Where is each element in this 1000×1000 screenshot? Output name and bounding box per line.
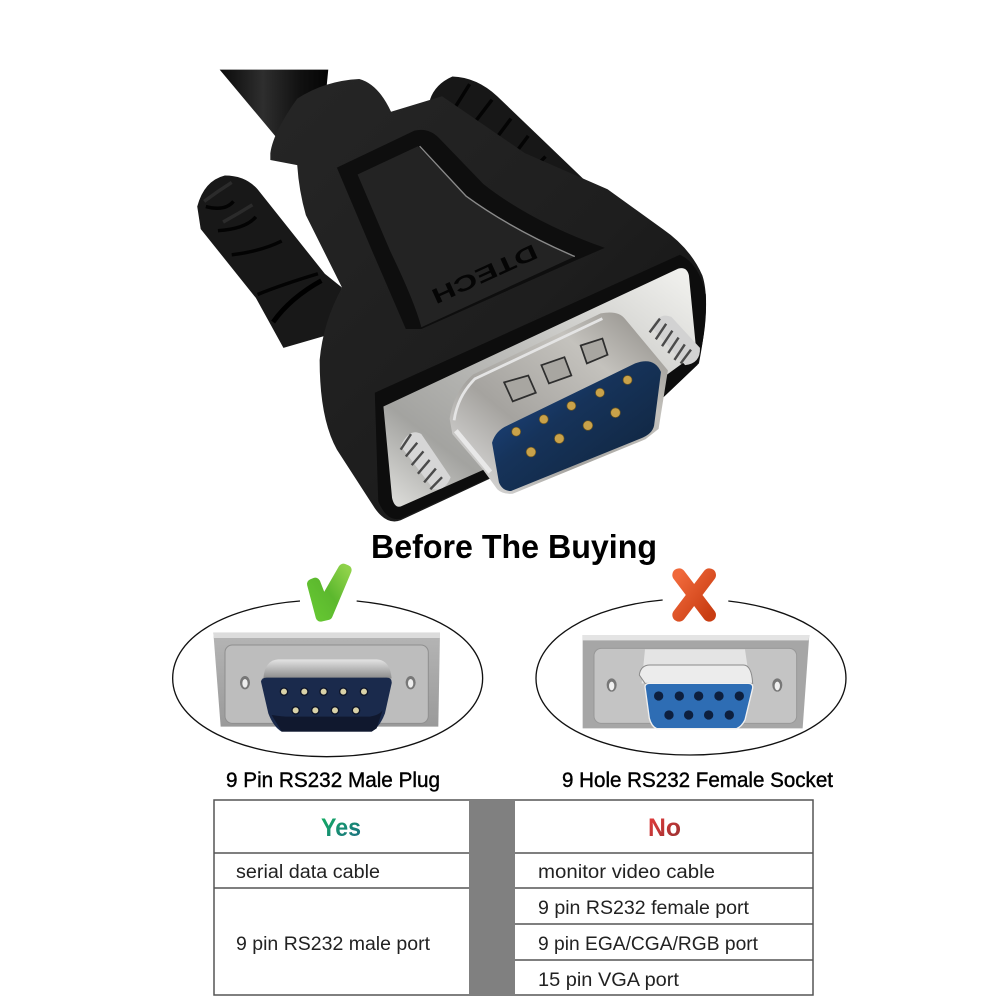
metal face plate bbox=[383, 268, 697, 507]
photo: D-sub serial connector bbox=[197, 70, 706, 522]
icon: red cross mark bbox=[679, 575, 709, 615]
gold pins bbox=[512, 375, 632, 457]
blue connector face bbox=[645, 683, 753, 729]
pins bbox=[280, 688, 368, 714]
caption: female socket: 9 Hole RS232 Female Socket bbox=[562, 769, 833, 792]
oval outline with gap bbox=[173, 601, 483, 757]
oval outline with gap bbox=[536, 600, 846, 755]
no row 1: monitor video cable bbox=[538, 862, 715, 883]
panel: male plug bbox=[173, 569, 483, 757]
comparison table bbox=[214, 800, 813, 995]
recessed panel on hood bbox=[337, 130, 605, 329]
yes row 2: 9 pin RS232 male port bbox=[236, 934, 431, 955]
grey divider column bbox=[469, 800, 515, 995]
shell dimples bbox=[504, 339, 608, 401]
connector hood bbox=[270, 79, 706, 522]
column head: no: No bbox=[648, 814, 681, 842]
connector shell bbox=[263, 659, 392, 678]
no row 2: 9 pin RS232 female port bbox=[538, 898, 750, 919]
brand mark: DTECH bbox=[428, 239, 541, 308]
yes row 1: serial data cable bbox=[236, 862, 380, 883]
caption: male plug: 9 Pin RS232 Male Plug bbox=[226, 769, 440, 792]
D-shell bbox=[450, 312, 668, 494]
no row 3: 9 pin EGA/CGA/RGB port bbox=[538, 934, 759, 955]
heading: Before The Buying bbox=[371, 528, 657, 565]
holes bbox=[654, 691, 744, 720]
cable bbox=[220, 70, 328, 138]
blue connector face bbox=[492, 361, 661, 491]
no row 4: 15 pin VGA port bbox=[538, 970, 680, 991]
panel: female socket bbox=[536, 575, 846, 755]
left thumb screw bbox=[197, 176, 342, 348]
mounting plate bbox=[583, 635, 809, 728]
column head: yes: Yes bbox=[321, 814, 361, 842]
icon: green check mark bbox=[312, 569, 347, 617]
left threaded screw bbox=[401, 432, 451, 489]
connector shell bbox=[639, 665, 753, 683]
dark frame around face plate bbox=[375, 255, 706, 519]
navy connector face bbox=[261, 678, 392, 732]
table frame bbox=[214, 800, 813, 995]
mounting plate bbox=[213, 633, 440, 727]
right thumb screw bbox=[430, 77, 585, 198]
right threaded screw bbox=[650, 316, 700, 365]
